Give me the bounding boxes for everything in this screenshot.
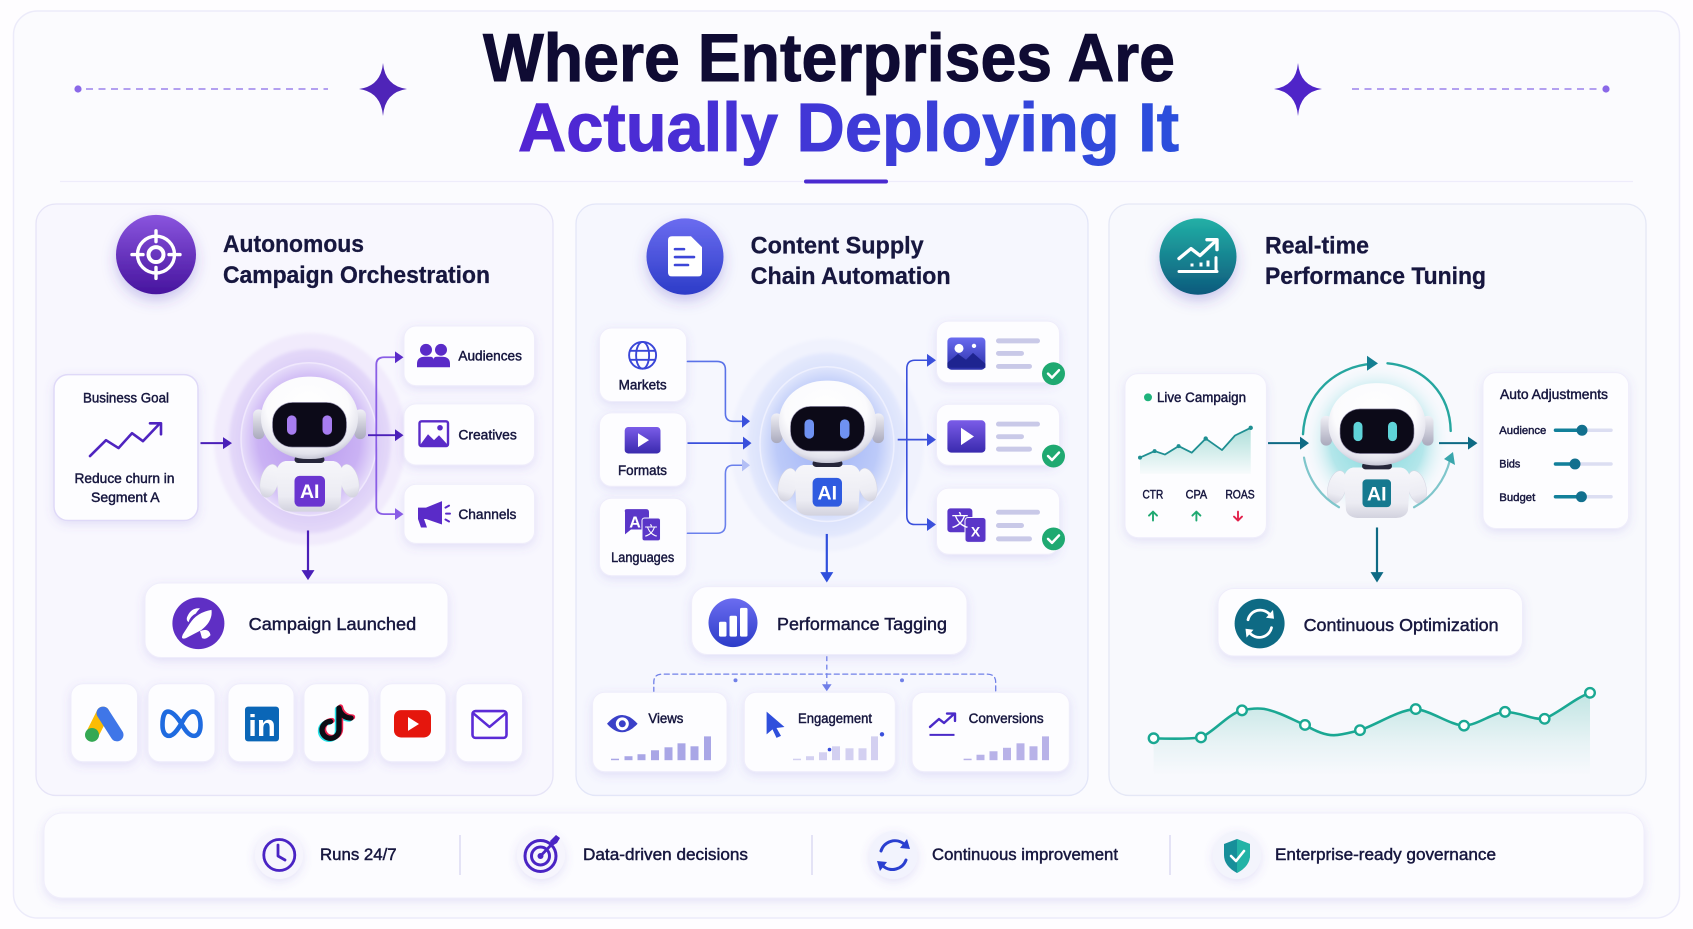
benefit: runs 24/7: Runs 24/7 [320,846,397,864]
logo: tiktok [304,684,369,762]
logo: linkedin [228,684,294,762]
robot with purple halo: AI [300,481,319,503]
card: continuous optimization [1218,589,1522,656]
title: Actually Deploying It [518,89,1179,166]
icon: right sparkle [1274,63,1322,116]
bar chart: engagement [793,732,884,760]
left dashed ornament [74,85,328,93]
card: languages: A [629,515,641,531]
panels row [36,204,1646,795]
robot with purple halo [214,333,406,545]
slider: budget [1499,491,1611,504]
card: conversions: Conversions [969,711,1044,726]
card: campaign launched: Campaign Launched [249,614,416,634]
heading: Autonomous [223,231,364,258]
arrow: robot to launch [302,530,314,580]
card: markets: Markets [619,378,667,393]
card: languages: Languages [611,550,674,565]
card: views [593,692,727,772]
robot with blue halo: AI [818,483,837,505]
heading [223,231,490,289]
arrow: robot to tagging [820,534,833,583]
icon: document [646,218,724,295]
title: Where Enterprises Are [483,20,1175,96]
bottom benefits bar [44,813,1644,898]
icon: target [116,215,196,294]
card: formats [600,413,686,486]
card: audiences [404,326,534,386]
heading: Chain Automation [751,263,951,290]
card: creatives [404,404,534,465]
slider: audience [1499,425,1611,437]
card: image output [936,321,1065,385]
logo: email [456,684,522,762]
title underline [60,180,1633,184]
bar chart: conversions [964,736,1049,760]
icon: growth chart [1160,218,1236,295]
benefit: continuous improvement [870,831,1118,879]
card: business goal: Reduce churn in [74,470,174,486]
card: views: Views [648,711,684,726]
card: business goal: Business Goal [83,389,169,405]
card: business goal [54,375,198,521]
card: translation output [936,488,1065,554]
heading: Performance Tuning [1265,263,1486,290]
heading: Campaign Orchestration [223,262,490,289]
benefit: enterprise-ready governance: Enterprise-ready governance [1275,846,1496,864]
logo: youtube [380,684,446,762]
card: live campaign: Live Campaign [1157,390,1246,405]
arrows: robot to outputs [898,354,936,531]
card: performance tagging: Performance Tagging [777,614,947,634]
kpi labels: CTR [1143,488,1164,501]
benefit: data-driven decisions [517,831,748,879]
arrow: robot to adjustments [1439,437,1478,450]
card: channels [404,484,534,543]
card: markets [600,328,686,401]
card: formats: Formats [618,463,667,478]
icon: left sparkle [359,63,407,116]
card: continuous optimization: Continuous Optimization [1304,615,1499,635]
arrow: goal to robot [200,437,232,449]
card: video output [936,404,1065,467]
kpi labels [1143,488,1255,501]
heading: Real-time [1265,232,1369,259]
slider: audience: Audience [1499,425,1546,437]
card: audiences: Audiences [458,348,522,363]
benefit: data-driven decisions: Data-driven decisions [583,846,748,864]
card: live campaign [1125,374,1266,538]
benefit: enterprise-ready governance [1213,831,1496,879]
card: channels: Channels [458,507,517,522]
logo: linkedin: in [248,708,276,743]
heading: Content Supply [751,232,924,259]
dashed connectors to metrics [654,656,996,692]
card: translation output: X [971,523,981,539]
bar chart: views [611,736,711,760]
line chart: live campaign [1138,426,1253,474]
arrows: inputs to robot [688,361,752,533]
slider: bids: Bids [1499,459,1521,471]
heading [1265,232,1486,290]
logo: meta [148,684,215,762]
panel: real-time performance tuning [1109,204,1646,795]
logo: google ads [71,684,138,762]
card: translation output: 文 [952,512,969,530]
arrow: campaign to robot [1268,437,1309,450]
robot with teal loop: AI [1367,484,1387,506]
card: conversions [912,692,1069,772]
card: auto adjustments: Auto Adjustments [1500,386,1608,402]
robot with teal loop [1303,356,1455,518]
robot with blue halo [730,339,924,551]
slider: bids [1499,459,1611,471]
panel: content supply chain automation [576,204,1088,795]
card: languages: 文 [644,523,658,538]
benefit: runs 24/7 [255,831,397,879]
arrow: robot to optimization [1370,527,1384,583]
arrows: robot to outputs [368,351,404,520]
heading [751,232,951,290]
card: campaign launched [145,583,448,657]
card: creatives: Creatives [458,428,517,443]
card: auto adjustments [1483,373,1629,528]
kpi arrows [1149,512,1242,521]
card: engagement [744,692,895,772]
card: languages [600,498,686,576]
title [483,20,1179,166]
card: business goal: Segment A [91,489,160,505]
card: performance tagging [692,587,967,655]
panel: autonomous campaign orchestration [36,204,553,795]
benefit: continuous improvement: Continuous improvement [932,846,1118,864]
kpi labels: ROAS [1225,488,1255,501]
right dashed ornament [1352,85,1610,93]
slider: budget: Budget [1499,492,1536,504]
card: engagement: Engagement [798,711,872,726]
kpi labels: CPA [1186,488,1207,501]
line chart: optimization trend [1149,688,1595,776]
